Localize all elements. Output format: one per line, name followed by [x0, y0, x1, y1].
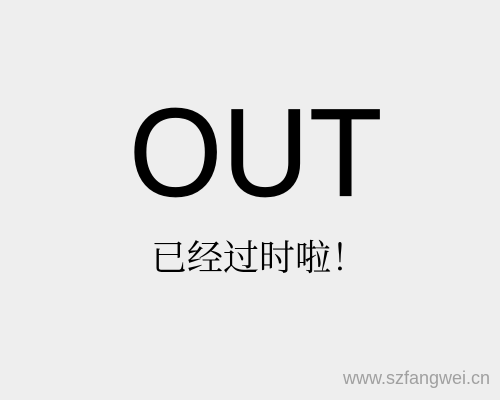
title: OUT: OUT: [129, 84, 382, 223]
subtitle text: 已经过时啦！: [151, 238, 367, 278]
watermark url: www.szfangwei.cn: [343, 368, 490, 388]
